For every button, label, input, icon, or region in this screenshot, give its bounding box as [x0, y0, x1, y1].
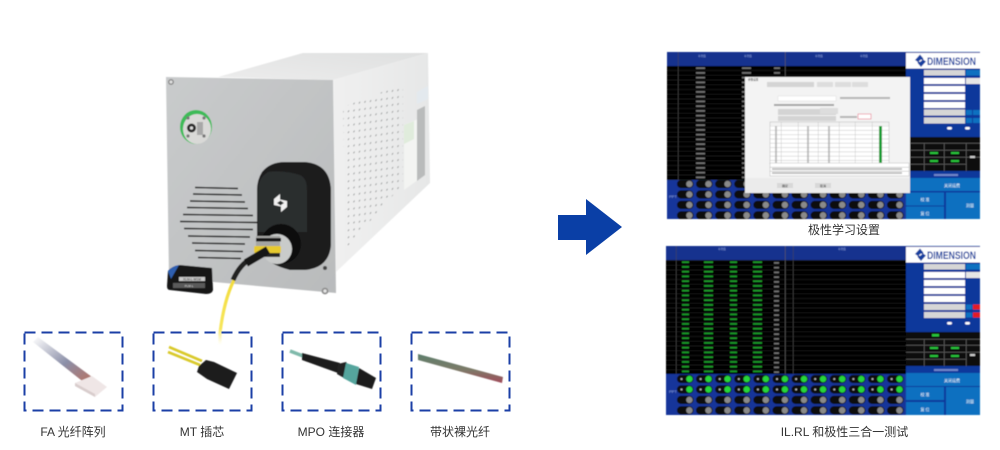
logo	[906, 53, 980, 68]
instrument front panel	[166, 77, 336, 293]
measurement table: 平均值	[744, 54, 752, 58]
button labels: 复 位	[920, 406, 930, 412]
instrument side face	[333, 53, 430, 272]
panel screws	[168, 79, 328, 294]
dialog buttons: 确定	[782, 183, 788, 188]
action buttons	[906, 178, 980, 219]
label: MPO: MPO 连接器	[298, 424, 364, 439]
form fields	[924, 70, 980, 130]
polarity settings dialog: 参数设置	[748, 78, 759, 82]
instrument top face	[218, 53, 428, 80]
caption: IL RL polarity test: IL.RL 和极性三合一测试	[781, 424, 908, 439]
lit channels	[677, 374, 906, 395]
status line	[934, 369, 958, 371]
image: FA fiber array	[33, 337, 107, 397]
caption: polarity learning settings: 极性学习设置	[808, 222, 880, 237]
dialog lower table	[770, 163, 909, 176]
label: ribbon: 带状裸光纤	[430, 424, 490, 439]
measurement table	[667, 52, 906, 181]
fiber cable boot and yellow cable	[220, 250, 268, 345]
label: FA: FA 光纤阵列	[40, 425, 106, 439]
action buttons	[906, 373, 980, 415]
panel: MPO connector	[282, 332, 380, 439]
logo: DIMENSION	[927, 56, 976, 68]
green FC optical port	[180, 110, 212, 144]
test result table	[666, 246, 906, 374]
label: MT: MT 插芯	[180, 425, 224, 439]
button labels: 测量	[966, 398, 974, 404]
button labels: 复 位	[920, 210, 930, 216]
unlit channels	[677, 395, 906, 415]
software window background	[666, 246, 980, 415]
test result table: 平均值	[718, 247, 726, 251]
form fields	[924, 264, 980, 324]
connector tag: XLM-L-W1M	[183, 277, 201, 281]
black connector housing	[254, 162, 331, 270]
panel: MT ferrule	[154, 332, 252, 439]
dashed frame: ribbon	[412, 332, 510, 410]
logo on housing	[274, 194, 287, 212]
connector tag: PLM-L	[185, 284, 194, 288]
screenshot: IL RL polarity test	[666, 246, 980, 415]
right control panel	[906, 52, 980, 219]
channel switch pills	[677, 179, 906, 219]
side label sticker	[404, 86, 428, 190]
panel: FA fiber array	[24, 332, 122, 439]
side ventilation holes	[343, 84, 403, 248]
blue arrow	[558, 199, 622, 255]
dashed frame: MT	[154, 332, 252, 410]
dialog inputs	[767, 82, 890, 121]
measurement table: 平均值	[860, 54, 868, 58]
dashed frame: MPO	[282, 332, 380, 410]
image: MT ferrule	[168, 347, 237, 389]
button labels: 关闭运费	[944, 377, 960, 383]
image: ribbon fiber	[418, 354, 503, 383]
logo	[906, 247, 980, 262]
measurement table: 平均值	[815, 54, 823, 58]
dashed frame: FA	[24, 332, 122, 410]
image: MPO connector	[290, 351, 376, 389]
test result table: 平均值	[838, 247, 846, 251]
button labels: 测量	[966, 202, 974, 208]
button labels: 关闭运费	[944, 182, 960, 188]
panel: ribbon bare fiber	[412, 332, 510, 439]
PPT side label: PPT	[669, 194, 677, 199]
logo: DIMENSION	[927, 250, 976, 262]
button labels: 校 准	[920, 391, 930, 397]
measurement table: 平均值	[698, 54, 706, 58]
result table	[906, 332, 980, 366]
result table	[906, 137, 980, 171]
software window background	[667, 52, 980, 219]
status line	[934, 174, 958, 176]
button labels: 校 准	[920, 196, 930, 202]
polarity settings dialog	[745, 77, 910, 193]
test instrument module	[166, 53, 430, 345]
button labels	[920, 182, 974, 216]
PPT side label: PPT	[669, 389, 677, 394]
dialog buttons	[777, 183, 831, 188]
speaker vent grill	[180, 188, 257, 258]
dialog buttons: 取消	[820, 183, 826, 188]
connector tag	[167, 265, 213, 294]
screenshot: polarity learning settings	[667, 52, 980, 219]
button labels	[920, 377, 974, 412]
right control panel	[906, 246, 980, 415]
dialog channel table	[770, 122, 889, 164]
